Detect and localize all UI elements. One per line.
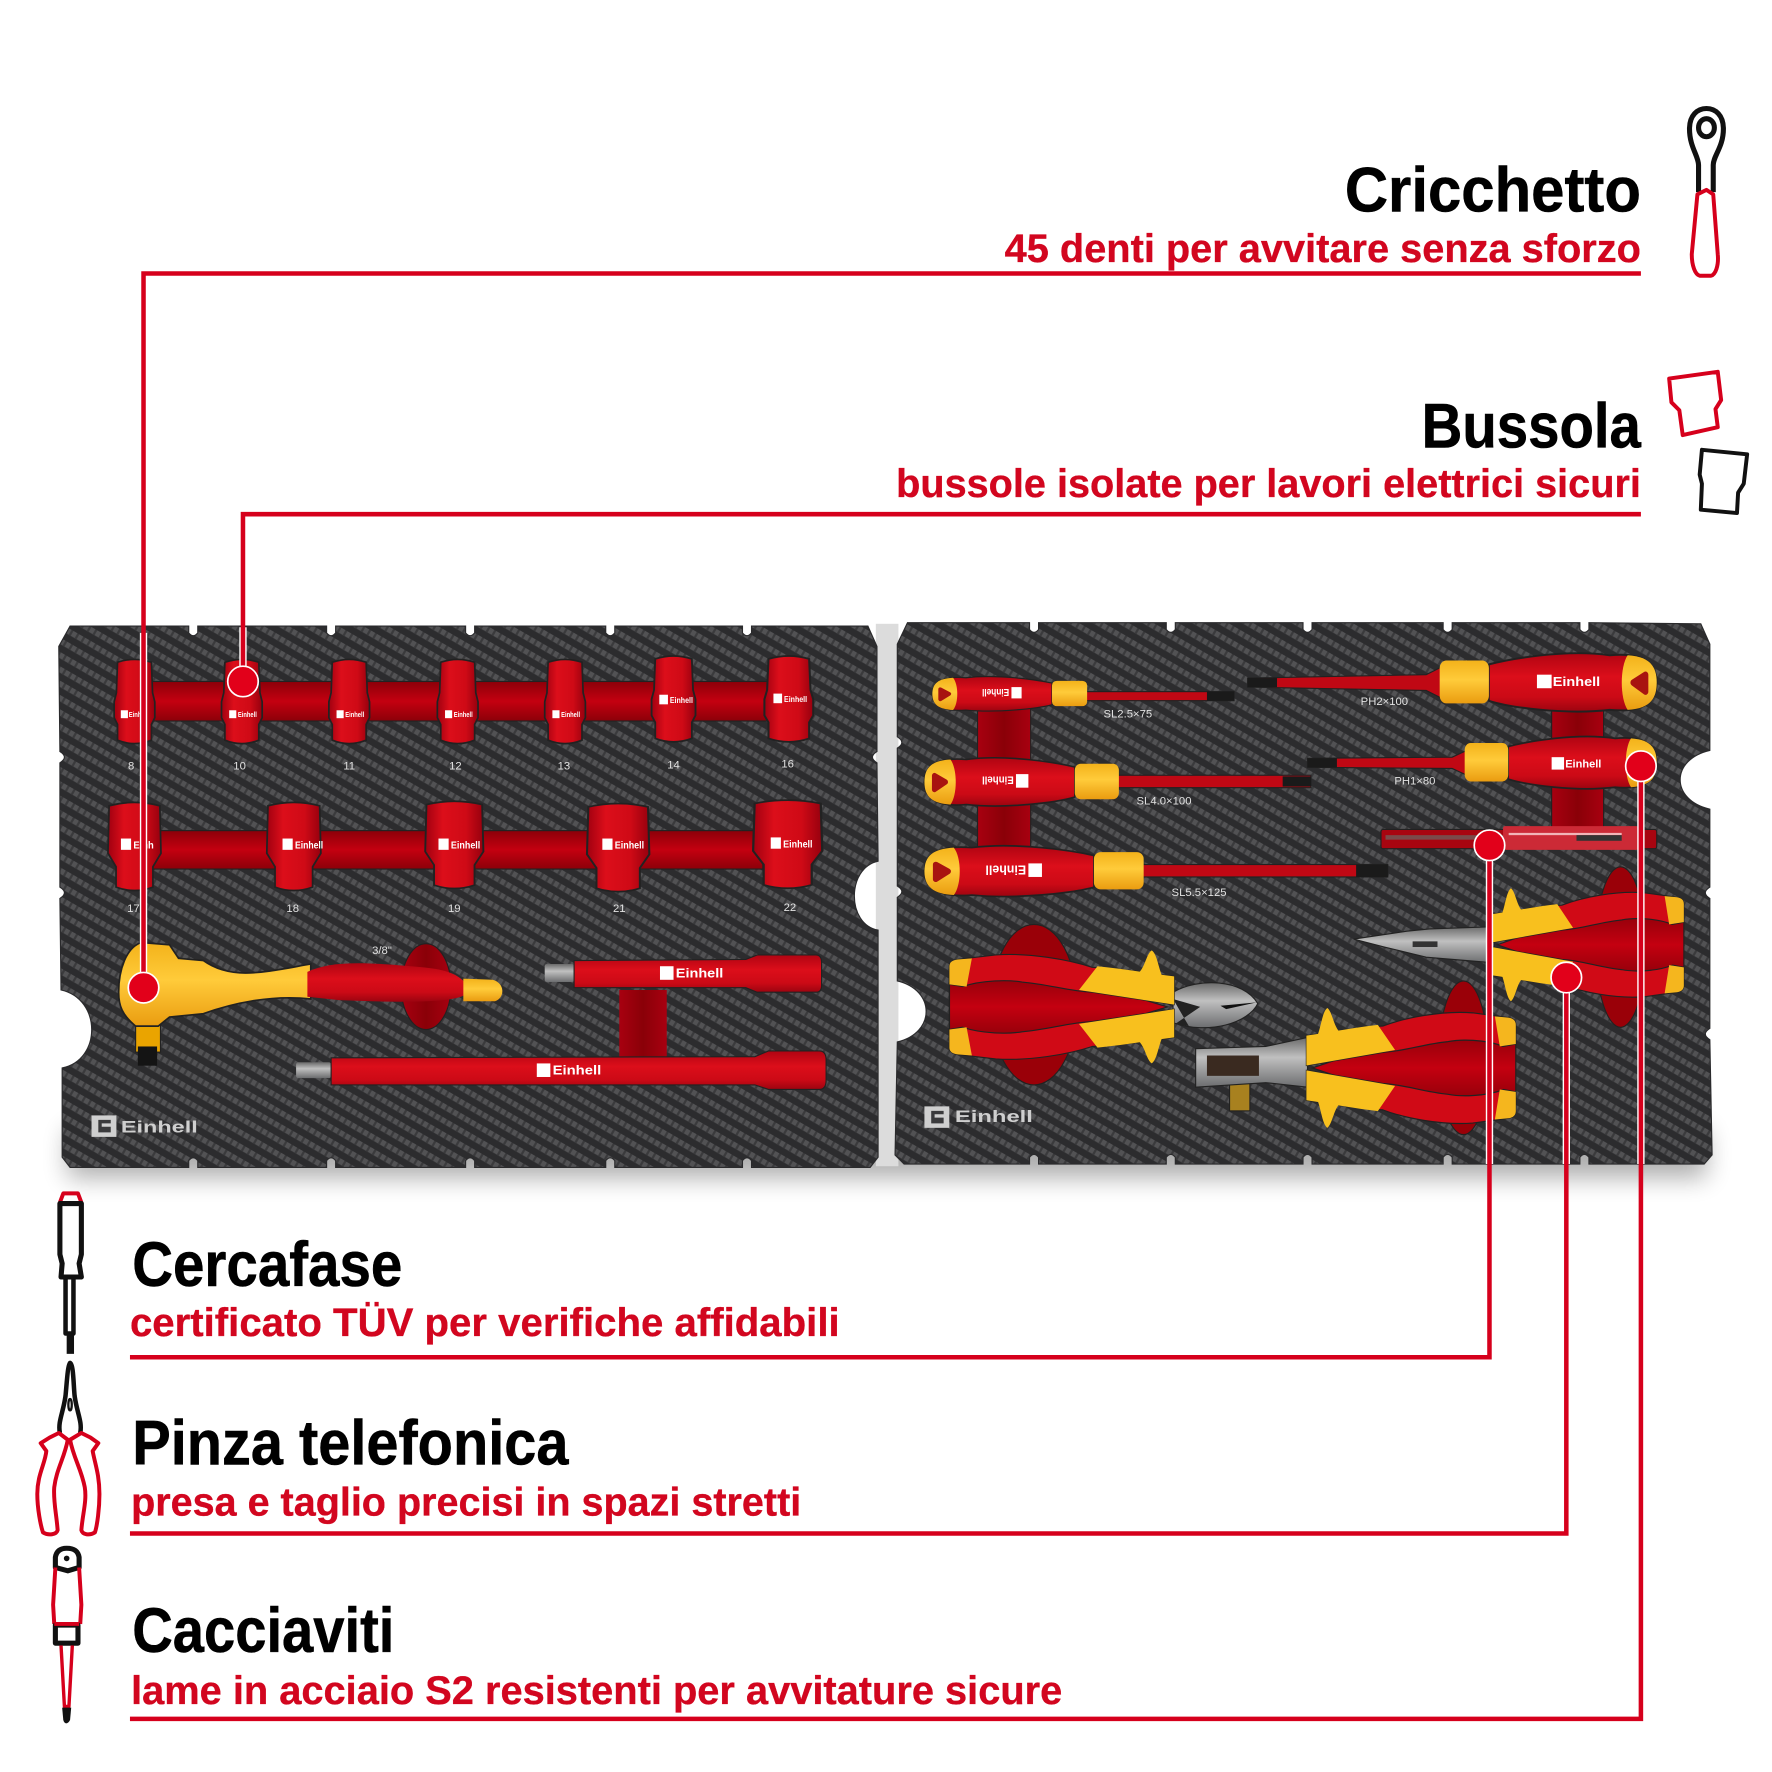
socket size labels row 2 [127, 902, 796, 915]
heading: Cacciaviti [132, 1596, 394, 1666]
extension bars [296, 955, 826, 1089]
screwdriver SL5.5x125: Einhell [985, 863, 1026, 877]
diagonal cutter pliers [949, 924, 1258, 1085]
sockets row 2: Einhell [783, 840, 813, 851]
leader: Pinza telefonica [130, 962, 1582, 1534]
callout: Cricchetto [1005, 108, 1723, 276]
description: 45 denti per avvitare senza sforzo [1005, 227, 1641, 271]
screwdriver SL2.5x75: Einhell [982, 686, 1009, 697]
extension bars: Einhell [553, 1064, 601, 1078]
sockets row 1: Einhell [238, 711, 257, 719]
description: bussole isolate per lavori elettrici sicuri [896, 462, 1641, 506]
icon: pliers [37, 1363, 99, 1534]
description: lame in acciaio S2 resistenti per avvitature sicure [131, 1669, 1062, 1713]
sockets row 1: Einhell [784, 694, 807, 704]
screwdriver SL4.0x100 [924, 758, 1311, 808]
extension bars: Einhell [676, 967, 723, 981]
screwdriver SL4.0x100: Einhell [982, 773, 1014, 785]
icon: red socket [1669, 372, 1721, 435]
callout: Cercafase [60, 1193, 840, 1354]
socket size labels row 2: 17 [127, 903, 140, 915]
tray foam left [59, 626, 878, 1167]
socket size labels row 1: 14 [667, 759, 680, 771]
sockets row 1: Einhell [454, 711, 473, 719]
sockets row 1: Einhell [345, 711, 364, 719]
icon: black socket [1700, 450, 1747, 513]
sockets row 1: Einhell [670, 695, 693, 705]
leader: Bussola [228, 514, 1641, 697]
ratchet: 3/8" [372, 945, 392, 957]
heading: Cercafase [132, 1230, 402, 1300]
callout: Cacciaviti [53, 1548, 1062, 1723]
sockets row 2: Einhell [295, 841, 323, 852]
shadow under trays [68, 1130, 1706, 1178]
sockets row 2: Einhell [615, 841, 644, 852]
sockets row 2: Einh [133, 841, 154, 852]
screwdriver PH2x100: PH2×100 [1361, 696, 1408, 708]
socket size labels row 2: 22 [784, 902, 796, 914]
description: presa e taglio precisi in spazi stretti [131, 1480, 801, 1524]
icon: ratchet [1690, 108, 1723, 276]
socket size labels row 1: 11 [343, 761, 355, 773]
callout: Bussola [896, 372, 1747, 513]
heading: Pinza telefonica [132, 1409, 569, 1479]
socket size labels row 2: 19 [448, 903, 461, 915]
leader: Cercafase [130, 830, 1505, 1357]
leader: Cacciaviti [130, 751, 1656, 1719]
icon: phase tester [60, 1193, 81, 1354]
ratchet [119, 943, 502, 1066]
panel: right foam tray with screwdrivers and pliers [895, 623, 1712, 1164]
phase tester [1381, 826, 1657, 850]
screwdriver PH1x80: PH1×80 [1394, 775, 1435, 787]
icon: screwdriver [53, 1548, 81, 1723]
screwdriver SL5.5x125: SL5.5×125 [1172, 887, 1227, 899]
socket size labels row 1: 13 [558, 761, 570, 773]
socket size labels row 1: 12 [449, 761, 462, 773]
screwdriver holder bars [978, 706, 1604, 849]
sockets row 2: Einhell [451, 841, 480, 852]
callout: Pinza telefonica [37, 1363, 801, 1534]
sockets row 1: Einhell [561, 711, 580, 719]
leader: Cricchetto [128, 273, 1641, 1003]
screwdriver SL2.5x75 [932, 677, 1234, 721]
socket size labels row 1: 8 [128, 761, 134, 773]
screwdriver PH2x100: Einhell [1553, 675, 1600, 689]
description: certificato TÜV per verifiche affidabili [130, 1301, 840, 1345]
wire stripping pliers [1196, 981, 1516, 1135]
heading: Cricchetto [1345, 155, 1641, 225]
gap between trays [876, 624, 898, 1166]
tray logo left [92, 1115, 198, 1137]
tray logo right: Einhell [955, 1107, 1033, 1126]
needle nose pliers [1354, 867, 1684, 1027]
screwdriver SL2.5x75: SL2.5×75 [1103, 709, 1152, 721]
socket size labels row 1: 10 [233, 761, 246, 773]
heading: Bussola [1422, 392, 1642, 462]
screwdriver PH1x80: Einhell [1565, 758, 1601, 770]
panel: left foam tray with socket set [59, 626, 878, 1167]
socket size labels row 2: 21 [613, 903, 626, 915]
tray logo right [924, 1106, 1033, 1128]
socket size labels row 2: 18 [286, 903, 299, 915]
screwdriver SL5.5x125 [924, 846, 1388, 899]
socket size labels row 1: 16 [781, 758, 794, 770]
tray foam right [895, 623, 1712, 1164]
socket bars [147, 681, 768, 869]
socket size labels row 1 [128, 758, 794, 773]
screwdriver PH2x100 [1248, 653, 1657, 712]
tray logo left: Einhell [121, 1117, 198, 1136]
screwdriver SL4.0x100: SL4.0×100 [1137, 796, 1191, 808]
sockets row 1: Einh [129, 711, 141, 719]
screwdriver PH1x80 [1308, 737, 1657, 789]
sockets row 1 [114, 656, 813, 744]
sockets row 2 [108, 800, 822, 892]
